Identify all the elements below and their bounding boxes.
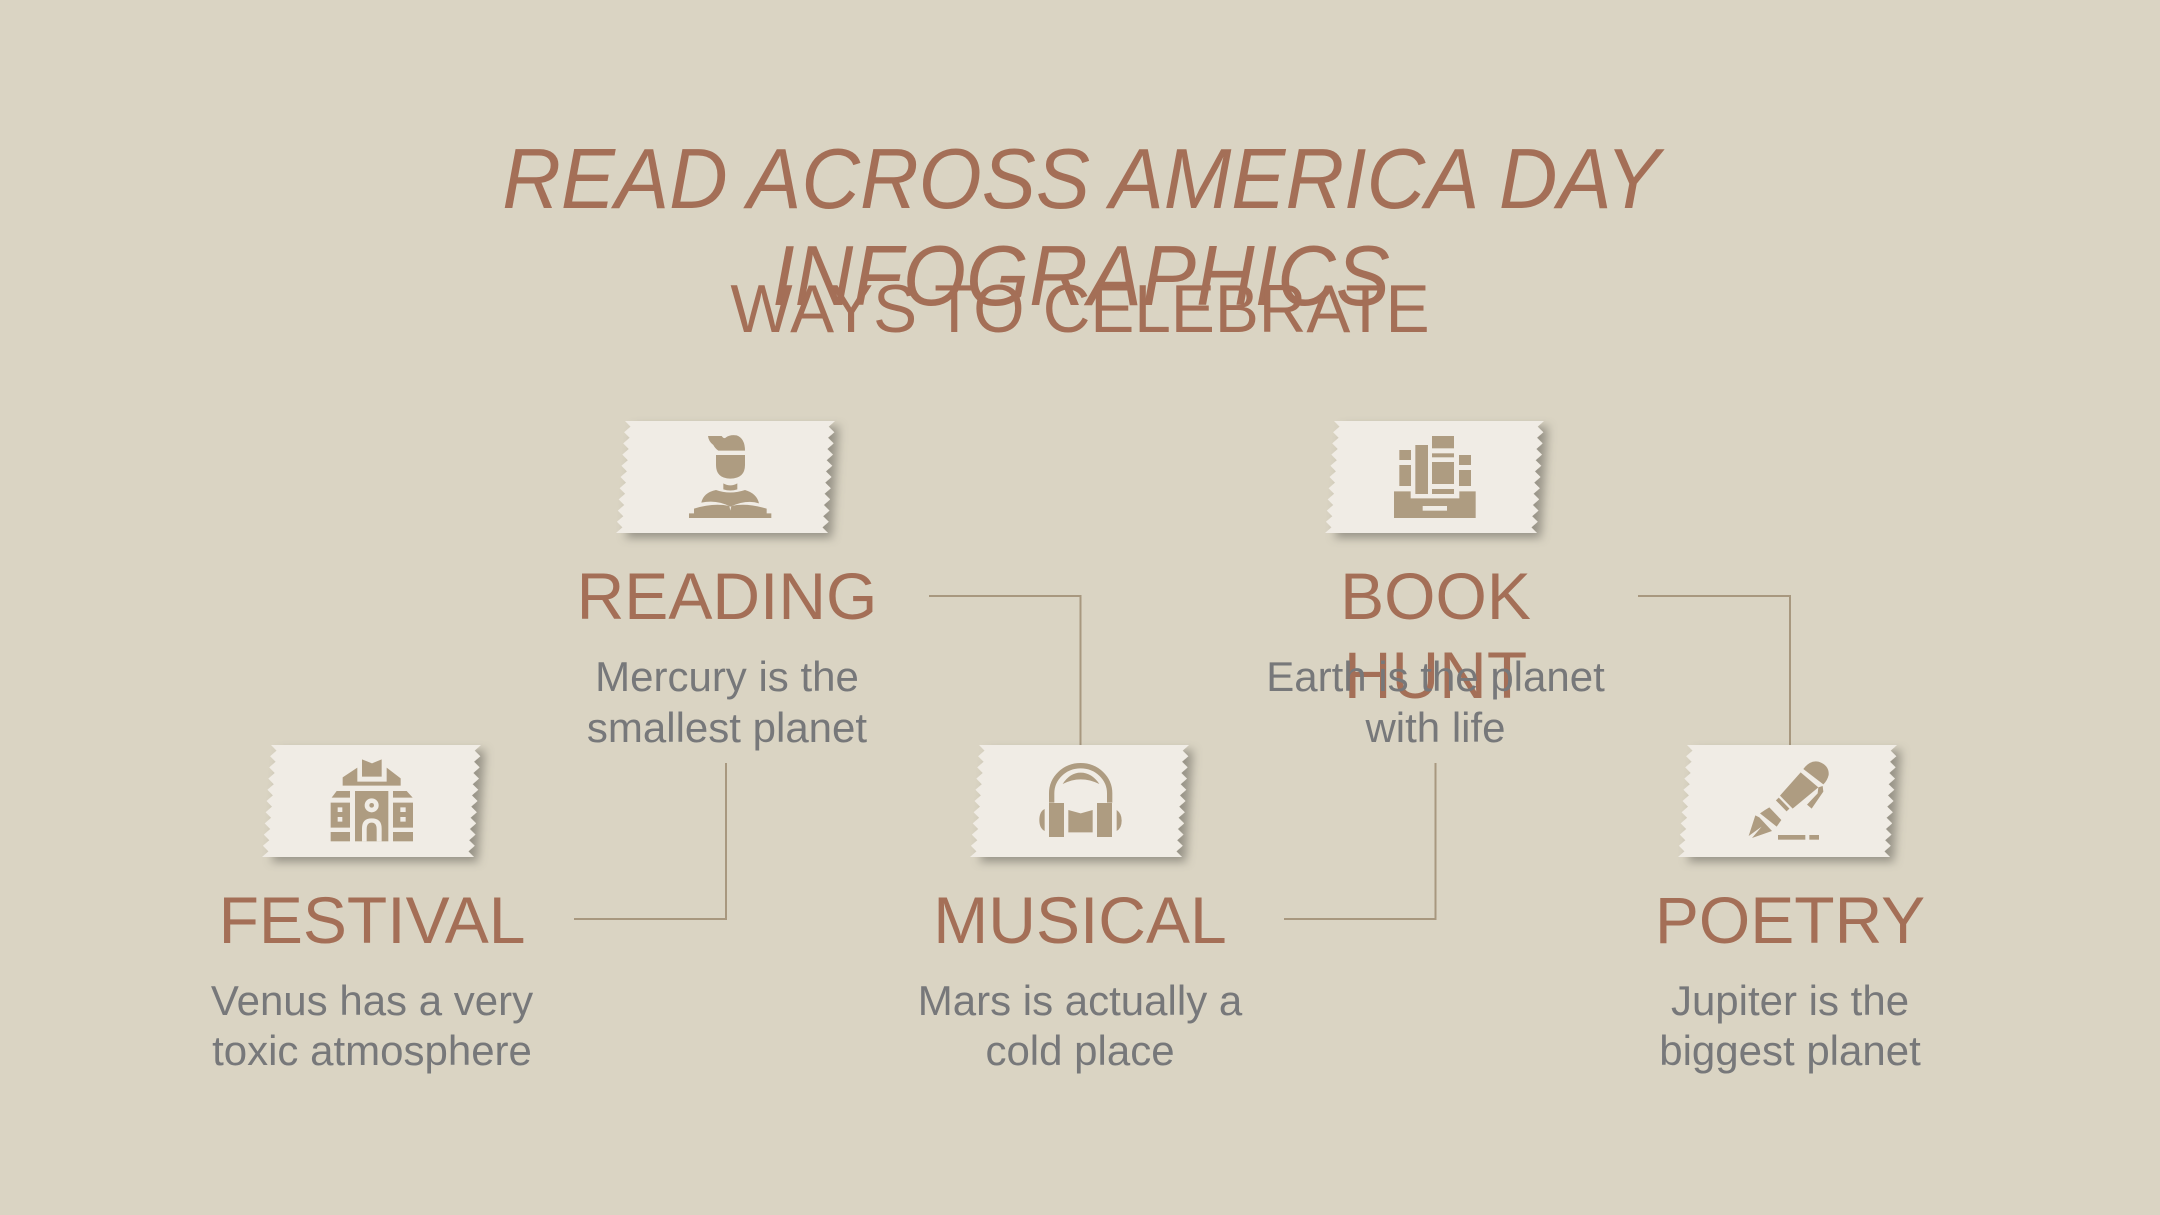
description: reading: smallest planet [587, 704, 867, 751]
connector: book hunt to poetry [1638, 596, 1790, 745]
description: poetry [1659, 977, 1921, 1074]
heading: book hunt: HUNT [1344, 638, 1527, 712]
description: musical: Mars is actually a [918, 977, 1243, 1024]
description: poetry: biggest planet [1659, 1027, 1921, 1074]
title: INFOGRAPHICS [772, 228, 1390, 323]
icon: person reading book [689, 435, 771, 518]
tape: reading [616, 421, 835, 533]
connector: festival to reading [574, 763, 726, 919]
description: poetry: Jupiter is the [1671, 977, 1909, 1024]
tape: festival [262, 745, 481, 857]
connector: reading to musical [929, 596, 1080, 745]
description: book hunt: Earth is the planet [1266, 653, 1605, 700]
description: reading: Mercury is the [595, 653, 859, 700]
panel: musical [918, 745, 1243, 1074]
icon: headphones with book [1039, 766, 1122, 837]
tape: book hunt [1325, 421, 1544, 533]
heading: musical: MUSICAL [933, 883, 1227, 957]
panel: poetry [1655, 745, 1925, 1074]
heading: poetry: POETRY [1655, 883, 1925, 957]
connector: musical to book hunt [1284, 763, 1436, 919]
panel: reading [577, 421, 877, 751]
title: READ ACROSS AMERICA DAY [502, 131, 1665, 226]
description: musical [918, 977, 1243, 1074]
icon: fountain pen [1749, 761, 1829, 840]
panel: book hunt [1266, 421, 1605, 751]
description: book hunt [1266, 653, 1605, 751]
title [502, 131, 1665, 323]
panel: festival [211, 745, 533, 1074]
heading: festival: FESTIVAL [219, 883, 525, 957]
heading: book hunt: BOOK [1340, 559, 1531, 633]
icon: library building [331, 759, 413, 841]
description: reading [587, 653, 867, 751]
description: book hunt: with life [1364, 704, 1506, 751]
subtitle: WAYS TO CELEBRATE [730, 271, 1430, 347]
heading: reading: READING [577, 559, 877, 633]
icon: books in tray [1394, 436, 1476, 518]
tape: poetry [1678, 745, 1897, 857]
description: festival: toxic atmosphere [212, 1027, 532, 1074]
description: musical: cold place [985, 1027, 1175, 1074]
description: festival: Venus has a very [211, 977, 533, 1024]
tape: musical [970, 745, 1189, 857]
heading: book hunt [1340, 559, 1531, 712]
description: festival [211, 977, 533, 1074]
